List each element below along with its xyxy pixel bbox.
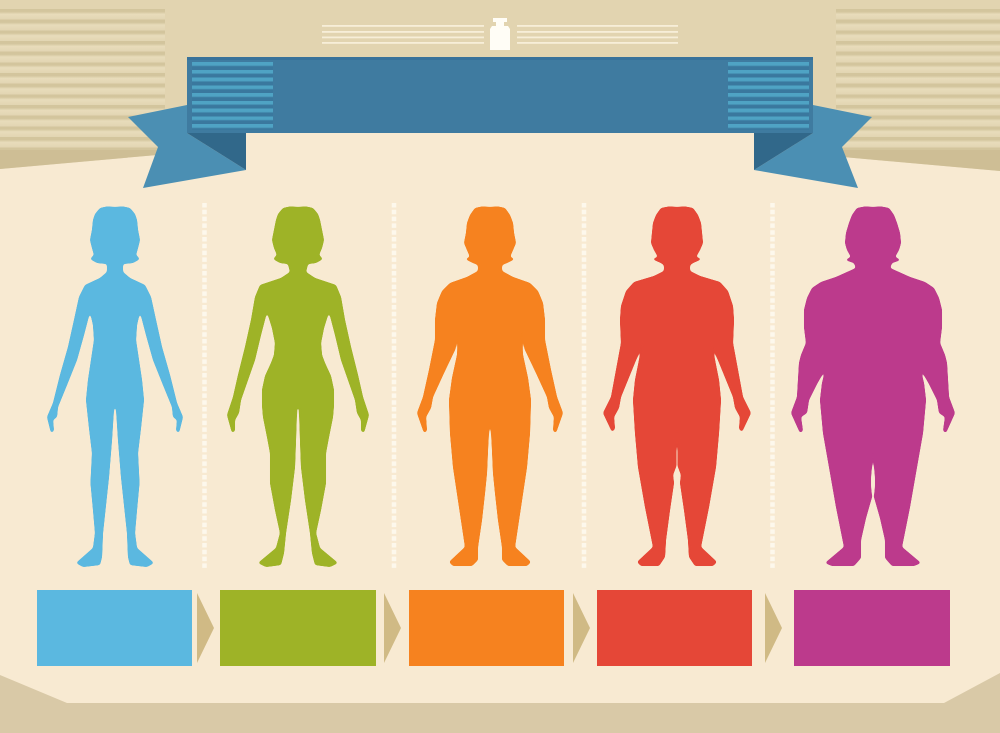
ribbon right tail [754,105,872,188]
label box: orange [409,590,564,666]
figure: orange overweight [417,206,563,566]
label box: blue [37,590,192,666]
figure: purple severely obese [791,206,955,566]
label box: red [597,590,752,666]
figure: green normal [227,206,369,567]
arrow 4 [765,593,782,663]
weight icon with lines [322,18,678,50]
arrow 1 [197,593,214,663]
top band [0,0,1000,171]
right striped shadow panel [836,9,1000,171]
ribbon banner [187,57,813,133]
figure: red obese [603,206,751,566]
bottom band [0,673,1000,733]
dotted dividers [204,203,772,570]
label box: purple [794,590,950,666]
left striped shadow panel [0,9,165,169]
ribbon left tail [128,105,246,188]
figure: blue slim [47,206,183,567]
label box: green [220,590,376,666]
arrow 3 [573,593,590,663]
arrow 2 [384,593,401,663]
